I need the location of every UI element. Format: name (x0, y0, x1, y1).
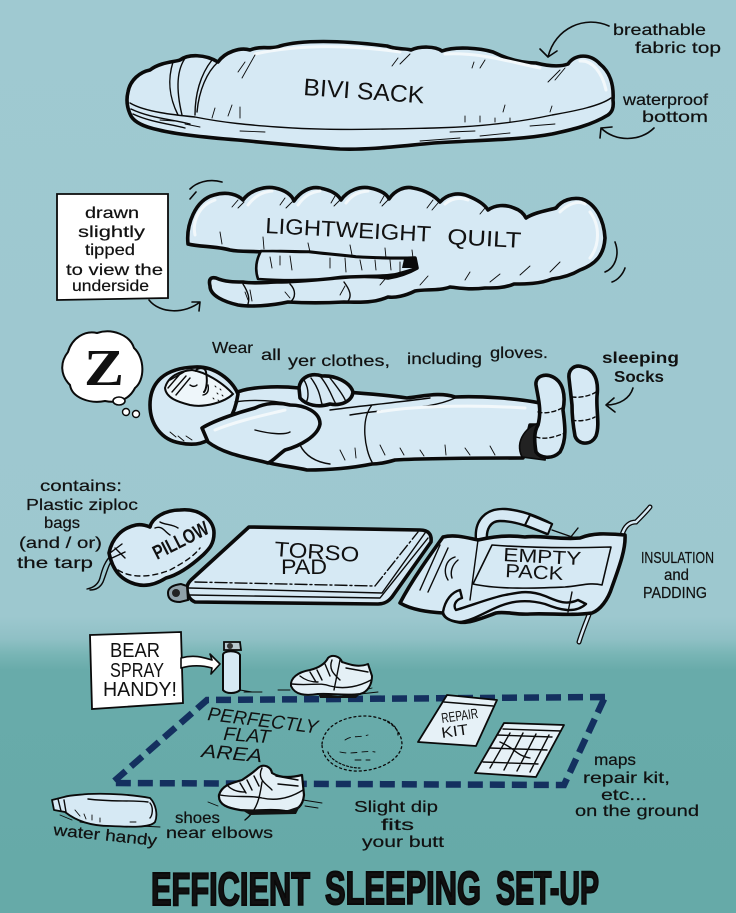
label: shoes near elbows: shoes (175, 810, 220, 827)
pad body (187, 527, 431, 604)
callout: drawn slightly tipped: tipped (85, 242, 135, 259)
quilt underside opening (256, 251, 417, 280)
panel: empty pack: PACK (505, 561, 564, 585)
sock far (569, 366, 598, 443)
panel: lightweight quilt: QUILT (447, 224, 522, 253)
title: SLEEPING (325, 862, 481, 913)
sock near (535, 375, 565, 457)
caption: wear all yer clothes: gloves. (490, 345, 548, 362)
pillow label: PILLOW (149, 518, 213, 564)
bivi sack seam (130, 98, 611, 129)
icon: bear spray canister (223, 642, 262, 693)
bivi sack hood folds (170, 57, 218, 115)
perfectly flat area dashed border (112, 697, 605, 785)
label: slight dip fits your butt: your butt (362, 834, 445, 851)
label: shoes near elbows: near elbows (166, 825, 273, 842)
label: slight dip fits your butt: Slight dip (354, 799, 438, 816)
pillow drawstring (87, 555, 114, 590)
thought bubble with Z: Z (84, 340, 124, 397)
label: breathable fabric top: fabric top (635, 40, 721, 57)
bivi sack label: BIVI SACK (303, 74, 425, 109)
icon: shoe by the area edge (278, 656, 378, 698)
quilt label: LIGHTWEIGHT (265, 213, 432, 247)
title: SET-UP (496, 862, 599, 913)
wiggle marks around quilt (190, 181, 625, 282)
jacket and trouser folds (235, 398, 455, 464)
flat area label: FLAT (223, 724, 272, 748)
panel: torso pad (168, 527, 431, 604)
hood (150, 367, 238, 444)
caption: wear all yer clothes: all (261, 347, 281, 364)
face (165, 370, 233, 406)
arm (202, 403, 320, 463)
label: insulation and padding (641, 550, 714, 602)
label: waterproof bottom (600, 92, 709, 138)
label: slight dip fits your butt: fits (381, 817, 414, 834)
hands clasped (299, 375, 353, 406)
callout: drawn slightly tipped (57, 194, 200, 311)
callout: bear spray handy (90, 632, 220, 709)
label: sleeping socks: Socks (614, 369, 664, 386)
callout: drawn slightly tipped: slightly (78, 224, 145, 241)
pad valve (168, 584, 188, 602)
quilt body (188, 187, 605, 306)
icon: repair kit bag (418, 695, 497, 746)
caption: wear all yer clothes: including (407, 351, 482, 368)
callout: bear spray handy: SPRAY (110, 660, 164, 682)
label: shoes near elbows (166, 810, 273, 842)
icon: shoe near elbows (208, 766, 322, 820)
label: sleeping socks (602, 350, 679, 412)
flat area label: PERFECTLY (206, 704, 320, 739)
label: insulation and padding: and (664, 567, 689, 584)
label: waterproof bottom: waterproof (622, 92, 709, 109)
pack drawcords (579, 507, 650, 642)
nose and hair (196, 368, 207, 392)
label: contains plastic ziploc bags: Plastic ziploc (26, 497, 138, 514)
label: insulation and padding: INSULATION (641, 550, 714, 567)
label: breathable fabric top: breathable (613, 22, 706, 39)
pack label panel (473, 545, 611, 588)
pack top strap (476, 509, 552, 540)
callout: bear spray handy: BEAR (110, 640, 160, 662)
pack body (400, 534, 625, 622)
caption: wear all yer clothes: yer clothes, (288, 353, 390, 370)
icon: repair kit bag: REPAIR (440, 705, 479, 726)
label: waterproof bottom: bottom (642, 109, 708, 126)
label: maps repair kit etc on the ground: on the ground (575, 803, 699, 820)
panel: pillow (87, 510, 214, 590)
pack label: EMPTY (503, 545, 582, 570)
panel: empty pack (400, 507, 650, 642)
callout: bear spray handy: HANDY! (103, 679, 177, 701)
label: insulation and padding: PADDING (643, 585, 707, 602)
label: contains plastic ziploc bags: bags (44, 515, 80, 532)
pillow body (109, 510, 214, 585)
flat area label (199, 704, 320, 767)
thought bubble with Z (62, 331, 142, 418)
icon: map in bag (475, 723, 564, 777)
caption: wear all yer clothes (212, 340, 548, 370)
bivi sack body (127, 42, 613, 149)
flat area label: AREA (199, 741, 263, 767)
callout: drawn slightly tipped: to view the (66, 262, 163, 279)
label: maps repair kit etc on the ground: repair kit, (583, 770, 670, 787)
callout: drawn slightly tipped: underside (72, 278, 149, 295)
pack bottom straps (443, 590, 586, 622)
title (151, 862, 599, 913)
label: maps repair kit etc on the ground: maps (594, 752, 636, 769)
label: maps repair kit etc on the ground: etc... (601, 787, 647, 804)
panel: torso pad: PAD (281, 556, 327, 579)
callout: drawn slightly tipped: drawn (85, 205, 139, 222)
panel: lightweight quilt (188, 187, 605, 306)
label: contains plastic ziploc bags: the tarp (17, 555, 93, 572)
quilt dark slit (402, 258, 418, 268)
icon: butt dip in ground (322, 716, 402, 771)
label: contains plastic ziploc bags: contains: (40, 478, 122, 495)
caption: wear all yer clothes: Wear (212, 340, 254, 357)
icon: water bottle (52, 794, 160, 827)
label: water handy: water handy (51, 822, 158, 850)
arrow to bear spray (181, 654, 220, 674)
trouser cuff (520, 423, 552, 460)
label: sleeping socks: sleeping (602, 350, 679, 367)
panel: bivi sack (127, 42, 613, 149)
label: slight dip fits your butt (354, 799, 445, 851)
label: contains plastic ziploc bags (17, 478, 138, 572)
label: contains plastic ziploc bags: (and / or) (19, 535, 102, 552)
icon: repair kit bag: KIT (440, 721, 469, 742)
label: maps repair kit etc on the ground (575, 752, 699, 820)
panel: sleeping person (150, 366, 598, 470)
pad label: TORSO (274, 538, 360, 567)
legs and torso (208, 387, 545, 470)
label: breathable fabric top (540, 22, 721, 57)
